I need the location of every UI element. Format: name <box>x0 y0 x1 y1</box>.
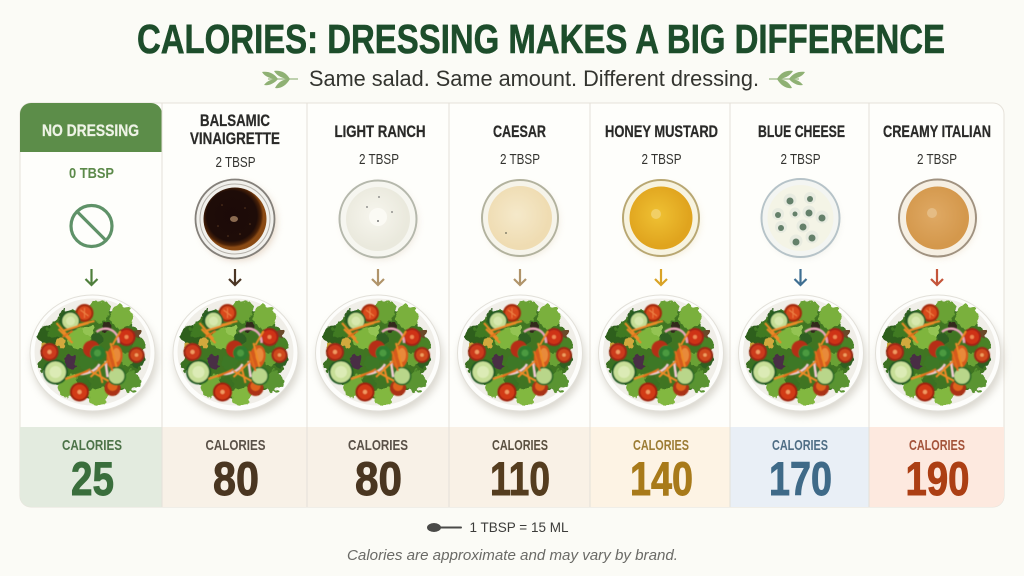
calorie value: 110 <box>490 452 550 505</box>
panel: comparison table <box>20 103 1004 507</box>
salad bowl <box>738 295 866 416</box>
panel: light ranch <box>307 123 449 507</box>
amount: 2 TBSP <box>917 151 957 168</box>
panel: balsamic vinaigrette <box>162 112 307 507</box>
salad bowl <box>598 295 726 416</box>
calorie label: CALORIES <box>772 437 828 454</box>
arrow <box>794 269 806 285</box>
amount: 2 TBSP <box>642 151 682 168</box>
heading: LIGHT RANCH <box>334 123 426 141</box>
calorie label: CALORIES <box>348 437 408 454</box>
icon: creamy italian cup <box>899 180 976 257</box>
amount: 2 TBSP <box>780 151 820 168</box>
header band <box>20 103 162 152</box>
calorie band <box>590 427 730 507</box>
panel: honey mustard <box>590 123 730 507</box>
heading: NO DRESSING <box>42 122 139 140</box>
arrow <box>655 269 667 285</box>
amount: 2 TBSP <box>359 151 399 168</box>
calorie band <box>20 427 162 507</box>
amount: 2 TBSP <box>500 151 540 168</box>
calorie value: 190 <box>906 452 970 505</box>
heading: HONEY MUSTARD <box>605 123 718 141</box>
tablespoon note: 1 TBSP = 15 ML <box>470 519 569 535</box>
icon: ranch cup <box>340 180 417 259</box>
icon: tablespoon <box>427 523 462 532</box>
heading: CAESAR <box>493 123 546 141</box>
arrow <box>514 269 526 285</box>
icon: honey mustard cup <box>623 180 699 257</box>
salad bowl <box>458 295 585 416</box>
arrow <box>372 269 384 285</box>
calorie label: CALORIES <box>62 437 122 454</box>
icon: caesar cup <box>482 180 558 257</box>
icon: blue cheese cup <box>762 179 840 257</box>
salad bowl <box>30 295 158 416</box>
calorie band <box>869 427 1004 507</box>
icon: left leaf sprig <box>262 71 298 88</box>
amount: 0 TBSP <box>69 165 114 182</box>
calorie band <box>730 427 869 507</box>
panel: blue cheese <box>730 123 869 507</box>
salad bowl <box>173 295 300 416</box>
icon: prohibited sign <box>71 206 112 246</box>
arrow <box>229 269 241 285</box>
calorie band <box>162 427 307 507</box>
calorie label: CALORIES <box>206 437 266 454</box>
calorie value: 170 <box>769 452 832 505</box>
panel: caesar <box>449 123 590 507</box>
calorie value: 80 <box>355 452 402 505</box>
arrow <box>86 269 98 285</box>
calorie label: CALORIES <box>633 437 689 454</box>
calorie label: CALORIES <box>492 437 548 454</box>
amount: 2 TBSP <box>216 154 256 171</box>
calorie band <box>449 427 590 507</box>
icon: right leaf sprig <box>769 71 805 88</box>
salad bowl <box>876 295 1003 416</box>
salad bowl <box>316 295 443 416</box>
calorie value: 140 <box>630 452 693 505</box>
panel: creamy italian <box>869 123 1004 507</box>
heading: VINAIGRETTE <box>190 130 280 148</box>
calorie value: 25 <box>71 452 114 505</box>
panel: no dressing <box>20 103 162 507</box>
calorie band <box>307 427 449 507</box>
icon: balsamic cup <box>196 180 276 260</box>
heading: BALSAMIC <box>200 112 270 130</box>
heading: CREAMY ITALIAN <box>883 123 991 141</box>
disclaimer: Calories are approximate and may vary by brand. <box>347 548 678 564</box>
calorie label: CALORIES <box>909 437 965 454</box>
calorie value: 80 <box>213 452 259 505</box>
arrow <box>931 269 943 285</box>
heading: BLUE CHEESE <box>758 123 845 141</box>
subtitle: Same salad. Same amount. Different dressing. <box>309 66 759 91</box>
